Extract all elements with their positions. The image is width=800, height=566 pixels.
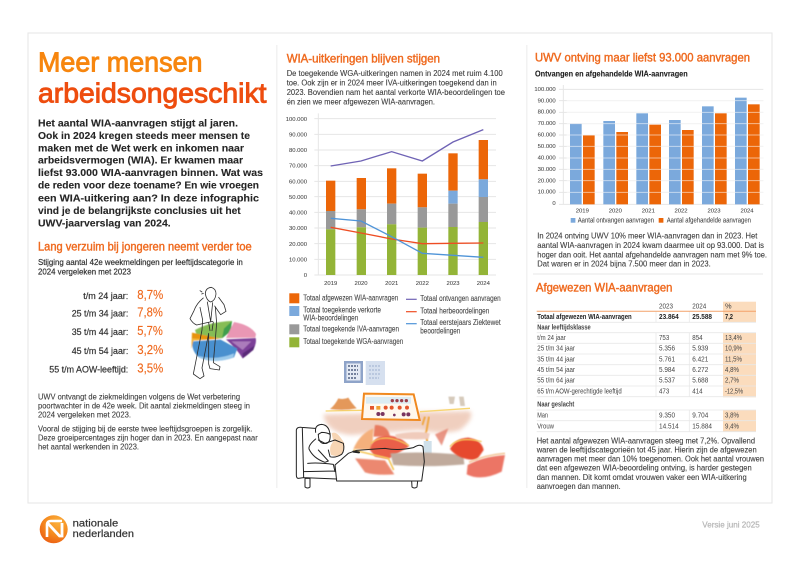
chart: ontvangen en afgehandelde aanvragen: 100.000 [534, 87, 556, 93]
chart: ontvangen en afgehandelde aanvragen [534, 85, 763, 215]
text block: ontvangen aanvragen: In 2024 ontving UWV 10% meer WIA-aanvragen dan in 2023. Het [537, 231, 758, 241]
table: afgewezen WIA-aanvragen: 753 [659, 333, 669, 342]
table: afgewezen WIA-aanvragen: 10,9% [725, 344, 742, 353]
chart: stacked bars and lines WIA: 2023 [446, 281, 460, 287]
chart: stacked bars and lines WIA: 90.000 [289, 132, 308, 138]
table: afgewezen WIA-aanvragen: 25.588 [692, 312, 712, 321]
text block: ziekmeldingen [38, 391, 258, 452]
table: afgewezen WIA-aanvragen: Naar geslacht [537, 400, 575, 409]
chart: stacked bars and lines WIA: 2021 [385, 281, 398, 287]
chart: ontvangen en afgehandelde aanvragen: 90.000 [538, 98, 556, 104]
text block: afgewezen aanvragen: Het aantal afgewezen WIA-aanvragen steeg met 7,2%. Opvallend [537, 435, 755, 445]
chart: ontvangen en afgehandelde aanvragen: 2021 [642, 209, 655, 215]
list: percentages per age group: 45 t/m 54 jaar: [72, 345, 128, 356]
text block: ontvangen aanvragen: Dat waren er in 2024 bijna 7.500 meer dan in 2023. [537, 259, 711, 269]
text block: ontvangen aanvragen: hoger dan ooit. Het aantal afgehandelde aanvragen nam met 9% toe. [537, 249, 767, 259]
table: afgewezen WIA-aanvragen: 4,8% [725, 365, 739, 374]
table: afgewezen WIA-aanvragen: 11,5% [725, 354, 742, 363]
table: afgewezen WIA-aanvragen: 14.514 [659, 422, 679, 431]
text block: introduction: Ook in 2024 kregen steeds meer mensen te [38, 131, 250, 142]
legend: chart WIA [289, 293, 501, 347]
table: afgewezen WIA-aanvragen: 2024 [692, 301, 706, 310]
heading: lang verzuim: Lang verzuim bij jongeren neemt verder toe [38, 240, 252, 254]
table: afgewezen WIA-aanvragen: 414 [692, 386, 703, 395]
legend: chart WIA: Totaal toegekende IVA-aanvragen [303, 324, 399, 333]
chart: stacked bars and lines WIA: 100.000 [286, 117, 308, 123]
text block: WIA-uitkeringen [287, 68, 505, 106]
table: afgewezen WIA-aanvragen: 5.537 [659, 376, 675, 385]
list: percentages per age group [49, 287, 164, 376]
list: percentages per age group: 7,8% [137, 305, 163, 320]
chart: ontvangen en afgehandelde aanvragen: 60.000 [538, 133, 556, 139]
table: afgewezen WIA-aanvragen: 55 t/m 64 jaar [537, 376, 575, 385]
text block: afgewezen aanvragen: aanvragen met meer dan 10% toegenomen. Ook het aantal vrouwen [537, 454, 764, 464]
heading: afgewezen: Afgewezen WIA-aanvragen [536, 281, 672, 295]
list: percentages per age group: 8,7% [137, 287, 164, 302]
chart: ontvangen en afgehandelde aanvragen: 0 [552, 201, 556, 207]
table: afgewezen WIA-aanvragen: -12,5% [725, 386, 743, 395]
chart: ontvangen en afgehandelde aanvragen: 80.000 [538, 110, 556, 116]
panel: infographic card [28, 33, 772, 503]
table: afgewezen WIA-aanvragen: 45 t/m 54 jaar [537, 365, 575, 374]
table: afgewezen WIA-aanvragen: 5.984 [659, 365, 675, 374]
text block: afgewezen aanvragen: dat een afgewezen WIA-beoordeling ontving, is harder gestegen [537, 463, 752, 473]
chart: ontvangen en afgehandelde aanvragen: 40.000 [538, 156, 556, 162]
table: afgewezen WIA-aanvragen: 15.884 [692, 422, 712, 431]
table: afgewezen WIA-aanvragen: 25 t/m 34 jaar [537, 344, 575, 353]
illustration: man with pie chart [190, 287, 256, 379]
chart: stacked bars and lines WIA: 50.000 [289, 195, 308, 201]
text block: introduction: arbeidsvermogen (WIA). Er kwamen maar [38, 156, 243, 166]
title [38, 47, 267, 109]
table: afgewezen WIA-aanvragen: 9,4% [725, 422, 739, 431]
text block: introduction: de reden voor deze toename? En wie vroegen [38, 181, 259, 192]
legend: chart WIA: WIA-beoordelingen [303, 314, 358, 323]
chart: ontvangen en afgehandelde aanvragen: 20.000 [538, 178, 556, 184]
title: arbeidsongeschikt [38, 78, 267, 109]
legend: chart WIA: Totaal toegekende verkorte [303, 306, 381, 314]
table: afgewezen WIA-aanvragen: % [725, 301, 732, 310]
text block: ziekmeldingen: poortwachter in de 42e week. Dit aantal ziekmeldingen steeg in [38, 400, 250, 410]
list: percentages per age group: 35 t/m 44 jaar: [72, 326, 128, 337]
list: percentages per age group: t/m 24 jaar: [83, 290, 128, 301]
table: afgewezen WIA-aanvragen: 9.350 [659, 410, 675, 419]
logo: nationale nederlanden [40, 515, 134, 543]
text block: introduction: vind je de belangrijkste conclusies uit het [38, 206, 241, 217]
table: afgewezen WIA-aanvragen: Totaal afgewezen WIA-aanvragen [537, 312, 632, 321]
chart: ontvangen en afgehandelde aanvragen: 2022 [674, 209, 688, 215]
list: percentages per age group: 3,2% [137, 342, 164, 357]
legend: chart WIA: Totaal toegekende WGA-aanvragen [303, 337, 403, 346]
list: percentages per age group: 3,5% [137, 361, 164, 376]
text block: ziekmeldingen: UWV ontvangt de ziekmeldingen volgens de Wet verbetering [38, 391, 240, 401]
table: afgewezen WIA-aanvragen: t/m 24 jaar [537, 333, 566, 342]
table: afgewezen WIA-aanvragen: 854 [692, 333, 703, 342]
text block: afgewezen aanvragen [536, 435, 764, 491]
heading: UWV ontving: UWV ontving maar liefst 93.000 aanvragen [535, 51, 750, 65]
text block: ontvangen aanvragen: aantal WIA-aanvragen in 2024 kwam daarmee uit op 93.000. Dat is [537, 240, 764, 250]
illustration: person on sofa in living room [296, 394, 505, 488]
text block: ontvangen aanvragen [537, 231, 767, 269]
list: percentages per age group: 55 t/m AOW-leeftijd: [49, 364, 128, 375]
text block: WIA-uitkeringen: toe. Ook zijn er in 2024 meer IVA-uitkeringen toegekend dan in [287, 78, 497, 88]
subtitle: stijging weekmeldingen: 2024 vergeleken met 2023 [38, 266, 131, 276]
logo: nationale nederlanden: nationale [73, 519, 119, 530]
text block: ziekmeldingen: het aantal werkenden in 2023. [38, 442, 139, 452]
table: afgewezen WIA-aanvragen: 9.704 [692, 410, 708, 419]
text block: ziekmeldingen: Deze groeipercentages zijn hoger dan in 2023. En aangepast naar [38, 433, 258, 443]
chart: stacked bars and lines WIA [286, 113, 496, 287]
table: afgewezen WIA-aanvragen: 5.688 [692, 376, 708, 385]
text block: introduction [38, 119, 263, 230]
text block: WIA-uitkeringen: 2023. Bovendien nam het aantal verkorte WIA-beoordelingen toe [287, 87, 505, 97]
chart: stacked bars and lines WIA: 80.000 [289, 148, 308, 154]
table: afgewezen WIA-aanvragen: 6.421 [692, 354, 708, 363]
table: afgewezen WIA-aanvragen: 473 [659, 386, 669, 395]
table: afgewezen WIA-aanvragen: 5.939 [692, 344, 708, 353]
chart: ontvangen en afgehandelde aanvragen: 30.000 [538, 167, 556, 173]
chart: stacked bars and lines WIA: 60.000 [289, 179, 308, 185]
chart: stacked bars and lines WIA: 70.000 [289, 164, 308, 170]
text block: ziekmeldingen: Vooral de stijging bij de eerste twee leeftijdsgroepen is zorgelijk. [38, 423, 252, 433]
text block: afgewezen aanvragen: aanvroegen dan mannen. [537, 481, 621, 491]
text block: introduction: liefst 93.000 WIA-aanvragen binnen. Wat was [38, 168, 263, 179]
text block: afgewezen aanvragen: dan mannen. Dit komt omdat vrouwen vaker een WIA-uitkering [537, 472, 747, 482]
version note: Versie juni 2025 [702, 520, 760, 529]
chart title: Ontvangen en afgehandelde WIA-aanvragen [535, 69, 688, 79]
table: afgewezen WIA-aanvragen: 3,8% [725, 410, 739, 419]
title: Meer mensen [38, 47, 202, 78]
legend: ontvangen en afgehandeld: Aantal ontvangen aanvragen [578, 218, 654, 225]
legend: chart WIA: Totaal ontvangen aanvragen [420, 294, 501, 303]
table: afgewezen WIA-aanvragen: 7,2 [725, 312, 733, 321]
table: afgewezen WIA-aanvragen: 13,4% [725, 333, 742, 342]
legend: chart WIA: beoordelingen [420, 327, 460, 336]
table: afgewezen WIA-aanvragen: 23.864 [659, 312, 679, 321]
chart: stacked bars and lines WIA: 2022 [416, 281, 429, 287]
chart: ontvangen en afgehandelde aanvragen: 10.000 [538, 190, 556, 196]
chart: stacked bars and lines WIA: 30.000 [289, 226, 308, 232]
table: afgewezen WIA-aanvragen: 65 t/m AOW-gerechtigde leeftijd [537, 386, 622, 395]
chart: stacked bars and lines WIA: 2019 [324, 281, 337, 287]
legend: chart WIA: Totaal herbeoordelingen [420, 306, 489, 315]
illustration: documents [344, 361, 385, 385]
heading: WIA-uitkeringen: WIA-uitkeringen blijven stijgen [287, 52, 440, 66]
subtitle: stijging weekmeldingen: Stijging aantal 42e weekmeldingen per leeftijdscategorie in [38, 257, 243, 267]
table: afgewezen WIA-aanvragen: Vrouw [537, 422, 555, 431]
legend: chart WIA: Totaal eerstejaars Ziektewet [420, 318, 501, 327]
list: percentages per age group: 25 t/m 34 jaar: [72, 308, 128, 319]
table: afgewezen WIA-aanvragen: 2,7% [725, 376, 739, 385]
text block: introduction: UWV-jaarverslag van 2024. [38, 219, 171, 230]
legend: ontvangen en afgehandeld [571, 218, 751, 225]
text block: WIA-uitkeringen: De toegekende WGA-uitkeringen namen in 2024 met ruim 4.100 [287, 68, 503, 78]
chart: ontvangen en afgehandelde aanvragen: 50.000 [538, 144, 556, 150]
table: afgewezen WIA-aanvragen: Naar leeftijdsklasse [537, 322, 591, 331]
text block: WIA-uitkeringen: én zien we meer afgewezen WIA-aanvragen. [287, 96, 435, 106]
chart: ontvangen en afgehandelde aanvragen: 2023 [707, 209, 721, 215]
table: afgewezen WIA-aanvragen: 2023 [659, 301, 673, 310]
text block: afgewezen aanvragen: waren de leeftijdscategorieën tot 45 jaar. Hierin zijn de afgewezen [536, 444, 757, 454]
subtitle: stijging weekmeldingen [38, 257, 243, 276]
table: afgewezen WIA-aanvragen: 5.761 [659, 354, 675, 363]
chart: stacked bars and lines WIA: 10.000 [289, 258, 308, 264]
table: afgewezen WIA-aanvragen: 5.356 [659, 344, 675, 353]
chart: stacked bars and lines WIA: 0 [304, 273, 308, 279]
chart: ontvangen en afgehandelde aanvragen: 70.000 [538, 121, 556, 127]
legend: ontvangen en afgehandeld: Aantal afgehandelde aanvragen [667, 218, 751, 225]
chart: stacked bars and lines WIA: 20.000 [289, 242, 308, 248]
legend: chart WIA: Totaal afgewezen WIA-aanvragen [303, 294, 398, 303]
logo: nationale nederlanden: nederlanden [73, 529, 134, 540]
table: afgewezen WIA-aanvragen: Man [537, 410, 548, 419]
text block: introduction: Het aantal WIA-aanvragen stijgt al jaren. [38, 119, 238, 130]
chart: ontvangen en afgehandelde aanvragen: 2019 [576, 209, 589, 215]
chart: ontvangen en afgehandelde aanvragen: 2020 [609, 209, 623, 215]
list: percentages per age group: 5,7% [137, 323, 163, 338]
table: afgewezen WIA-aanvragen: 6.272 [692, 365, 708, 374]
chart: stacked bars and lines WIA: 2024 [477, 281, 491, 287]
chart: stacked bars and lines WIA: 40.000 [289, 211, 308, 217]
chart: stacked bars and lines WIA: 2020 [354, 281, 368, 287]
text block: introduction: maken met de Wet werk en inkomen naar [38, 143, 244, 154]
table: afgewezen WIA-aanvragen: 35 t/m 44 jaar [537, 354, 575, 363]
text block: introduction: een WIA-uitkering aan? In deze infographic [38, 193, 259, 204]
text block: ziekmeldingen: 2024 vergeleken met 2023. [38, 410, 131, 420]
table: afgewezen WIA-aanvragen [537, 301, 756, 432]
chart: ontvangen en afgehandelde aanvragen: 2024 [740, 209, 754, 215]
